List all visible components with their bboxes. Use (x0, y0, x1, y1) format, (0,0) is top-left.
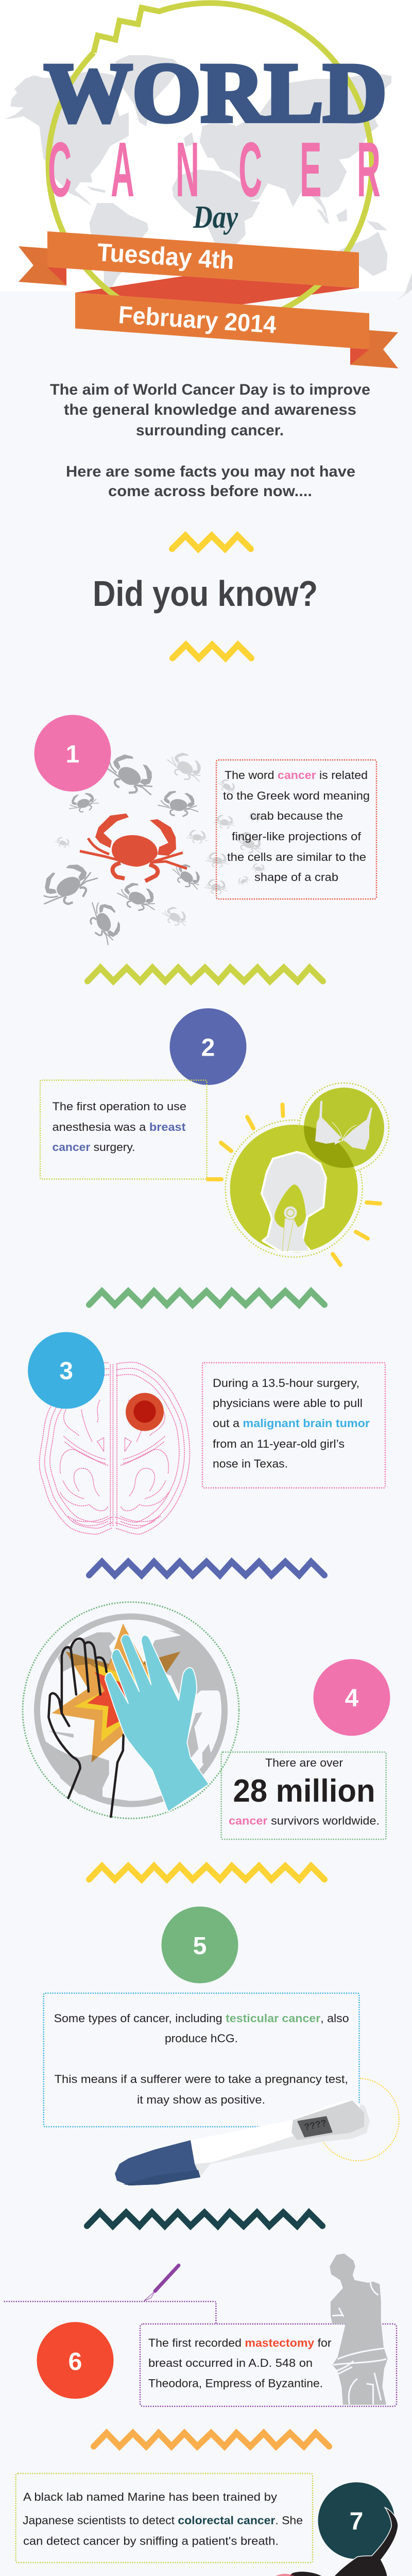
panel: fact 3 brain (28, 1332, 385, 1534)
title: Cancer: CANCER (48, 126, 381, 213)
ribbon one: Tuesday 4th: Tuesday 4th (96, 239, 235, 275)
ribbon two: February 2014 (75, 293, 398, 368)
text box 4: cancer survivors worldwide. (229, 1815, 380, 1827)
text box 7a: can detect cancer by sniffing a patient's breath. (23, 2535, 279, 2548)
text box 5 (44, 1993, 359, 2127)
text box 1 (216, 760, 376, 899)
text box 3: out a malignant brain tumor (213, 1417, 370, 1430)
panel: fact 5 pregnancy test (44, 1906, 399, 2185)
number badge 2: 2 (201, 1035, 215, 1061)
illustration: mask and bra (226, 1083, 389, 1257)
panel: fact 2 breast surgery (40, 1008, 389, 1265)
text box 3: During a 13.5-hour surgery, (213, 1377, 359, 1389)
text box 1: The word cancer is related (225, 769, 368, 782)
text box 6: breast occurred in A.D. 548 on (148, 2357, 313, 2369)
intro text: Here are some facts you may not have (66, 463, 355, 480)
number badge 7: 7 (350, 2508, 363, 2535)
number badge 1: 1 (66, 741, 79, 768)
lime globe ring with jagged break (48, 3, 372, 327)
zigzag divider: yellow (172, 536, 251, 549)
number badge 1 (34, 715, 111, 791)
ribbon two: February 2014: February 2014 (117, 301, 277, 339)
text box 2: The first operation to use (53, 1100, 186, 1113)
illustration: high five over globe (23, 1602, 239, 1819)
text box 1: to the Greek word meaning (223, 789, 370, 802)
text box 5: produce hCG. (165, 2032, 238, 2045)
text box 2 (40, 1080, 207, 1179)
text box 5: it may show as positive. (137, 2093, 265, 2106)
text box 6: Theodora, Empress of Byzantine. (148, 2377, 323, 2390)
number badge 5 (162, 1906, 238, 1984)
text box 1: shape of a crab (254, 871, 338, 884)
zigzag divider: yellow (173, 645, 251, 658)
text box 2: anesthesia was a breast (53, 1121, 186, 1133)
text box 1: finger-like projections of (232, 830, 362, 843)
panel: fact 7 sniffing dog (16, 2473, 398, 2576)
dashed yellow arc (323, 2078, 399, 2161)
text box 1: crab because the (250, 809, 343, 822)
yellow rays (208, 1105, 380, 1265)
ribbon fold connector (75, 276, 359, 304)
zigzag divider: dark teal (87, 2212, 322, 2226)
intro text: the general knowledge and awareness (64, 401, 356, 418)
ribbon one: Tuesday 4th (19, 231, 359, 288)
text box 3: nose in Texas. (213, 1457, 288, 1470)
intro text: surrounding cancer. (136, 422, 284, 439)
intro text: The aim of World Cancer Day is to improve (50, 381, 370, 398)
text box 2: cancer surgery. (53, 1141, 135, 1154)
number badge 3: 3 (59, 1358, 73, 1385)
number badge 6 (37, 2322, 113, 2399)
text box 5: This means if a sufferer were to take a pregnancy test, (55, 2073, 348, 2086)
text box 4: 28 million (233, 1773, 375, 1809)
illustration: Venus statue (330, 2253, 388, 2405)
text box 7a: A black lab named Marine has been trained by (23, 2490, 277, 2503)
illustration: gray crabs (32, 748, 206, 947)
number badge 7 (318, 2482, 394, 2559)
title: World: WORLD (44, 46, 387, 140)
zigzag divider: lime (88, 968, 323, 981)
zigzag divider: orange (94, 2433, 329, 2446)
illustration: pregnancy test (115, 2099, 370, 2185)
heading: Did you know: Did you know? (93, 573, 318, 614)
text box 4 (221, 1752, 386, 1839)
illustration: dotted brain with tumour (40, 1362, 190, 1534)
number badge 2 (170, 1008, 246, 1085)
illustration: dog silhouette (230, 2507, 398, 2576)
title: Day: Day (193, 200, 238, 235)
text box 7a: Japanese scientists to detect colorectal cancer . She (23, 2514, 303, 2527)
number badge 5: 5 (193, 1933, 207, 1960)
text box 1: the cells are similar to the (227, 851, 366, 863)
text box 5: Some types of cancer, including testicular cancer , also (54, 2012, 349, 2025)
number badge 3 (28, 1332, 105, 1409)
text box 4: There are over (265, 1756, 343, 1769)
panel: fact 1 crab (32, 715, 376, 947)
zigzag divider: yellow (89, 1866, 324, 1879)
zigzag divider: indigo (89, 1562, 324, 1575)
zigzag divider: green (89, 1291, 324, 1304)
panel: fact 6 mastectomy (4, 2253, 397, 2406)
illustration: red scent target (263, 2574, 307, 2576)
intro text (50, 381, 370, 500)
text box 3: physicians were able to pull (213, 1397, 363, 1410)
world map backdrop (5, 55, 412, 301)
text box 3 (202, 1363, 385, 1488)
illustration: red crab (80, 814, 187, 881)
text box 6: The first recorded mastectomy for (148, 2336, 332, 2349)
illustration: pregnancy test: ???? (303, 2117, 328, 2132)
panel: fact 4 survivors (23, 1602, 390, 1839)
header (0, 0, 412, 368)
number badge 4: 4 (345, 1685, 359, 1712)
number badge 6: 6 (68, 2348, 82, 2376)
illustration: faded crabs (54, 748, 266, 929)
text box 7a (16, 2473, 313, 2563)
text box 6 (140, 2324, 397, 2406)
dotted connector and scalpel (4, 2265, 216, 2324)
white header background (0, 0, 412, 292)
text box 3: from an 11-year-old girl’s (213, 1437, 345, 1450)
number badge 4 (313, 1659, 390, 1736)
intro text: come across before now.... (108, 483, 312, 500)
